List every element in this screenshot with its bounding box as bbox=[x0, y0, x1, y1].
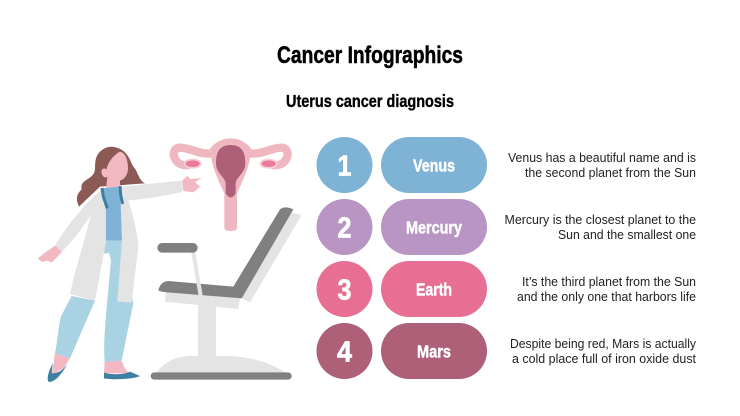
pill: Mercury: Mercury bbox=[406, 218, 462, 238]
hair bbox=[77, 147, 145, 207]
description 4: Despite being red, Mars is actually bbox=[510, 336, 696, 351]
description 1: the second planet from the Sun bbox=[525, 165, 696, 180]
row 4: Mars bbox=[316, 323, 696, 379]
illustration: uterus bbox=[174, 138, 288, 231]
title: Cancer Infographics bbox=[277, 42, 463, 69]
number badge 4 bbox=[316, 323, 372, 379]
subtitle: Uterus cancer diagnosis bbox=[286, 91, 454, 111]
row 3: Earth bbox=[316, 261, 696, 317]
blue top bbox=[101, 187, 122, 241]
face and neck bbox=[101, 152, 128, 189]
shoes bbox=[48, 363, 140, 382]
pill: Earth: Earth bbox=[416, 280, 452, 300]
illustration: doctor bbox=[38, 147, 202, 382]
pill: Mars bbox=[381, 323, 487, 379]
open hand bbox=[38, 245, 62, 263]
description 3 bbox=[517, 274, 696, 304]
number badge 2 bbox=[316, 199, 372, 255]
number badge 4: 4 bbox=[337, 336, 352, 368]
pill: Mars: Mars bbox=[417, 342, 451, 362]
row 2: Mercury bbox=[316, 199, 696, 255]
pill: Venus bbox=[381, 137, 487, 193]
legs and trousers bbox=[52, 241, 133, 375]
pointing hand bbox=[182, 176, 202, 192]
number badge 3: 3 bbox=[338, 274, 352, 306]
description 3: It’s the third planet from the Sun bbox=[522, 274, 696, 289]
description 4 bbox=[510, 336, 696, 366]
number badge 1: 1 bbox=[338, 150, 352, 182]
description 1 bbox=[508, 150, 696, 180]
illustration: exam chair bbox=[151, 207, 302, 380]
pill: Earth bbox=[381, 261, 487, 317]
number badge 3 bbox=[316, 261, 372, 317]
number badge 2: 2 bbox=[338, 212, 352, 244]
description 2: Sun and the smallest one bbox=[558, 227, 696, 242]
description 1: Venus has a beautiful name and is bbox=[508, 150, 696, 165]
pill: Venus: Venus bbox=[413, 156, 455, 176]
white coat bbox=[55, 181, 183, 303]
pill: Mercury bbox=[381, 199, 487, 255]
description 3: and the only one that harbors life bbox=[517, 289, 696, 304]
row 1: Venus bbox=[316, 137, 696, 193]
description 2: Mercury is the closest planet to the bbox=[504, 212, 696, 227]
description 2 bbox=[504, 212, 696, 242]
stethoscope bbox=[102, 186, 123, 208]
number badge 1 bbox=[316, 137, 372, 193]
description 4: a cold place full of iron oxide dust bbox=[512, 351, 696, 366]
